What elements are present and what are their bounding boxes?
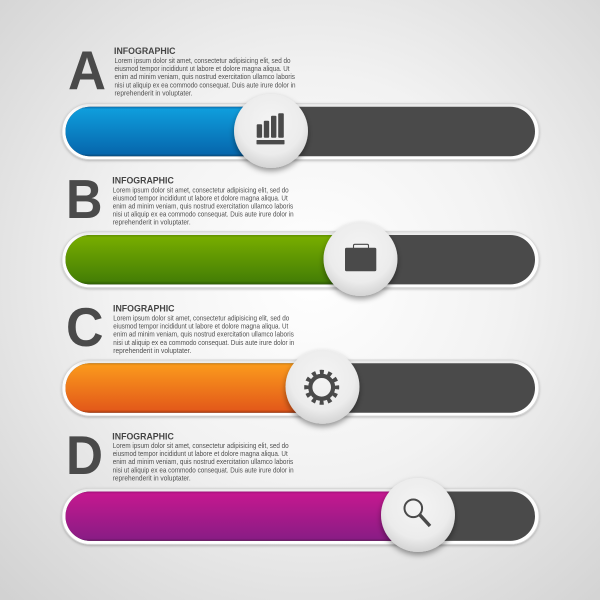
- knob C: [286, 350, 360, 424]
- text block B: reprehenderit in voluptater.: [113, 218, 191, 227]
- text block C: nisi ut aliquip ex ea commodo consequat. Duis aute irure dolor in: [113, 338, 294, 347]
- text block C: enim ad minim veniam, quis nostrud exercitation ullamco laboris: [113, 330, 294, 339]
- letter C: C: [66, 296, 104, 358]
- letter B: B: [66, 168, 102, 230]
- text block C: Lorem ipsum dolor sit amet, consectetur adipisicing elit, sed do: [113, 314, 289, 322]
- text block A: reprehenderit in voluptater.: [114, 88, 192, 97]
- icon: magnifier: [404, 500, 430, 526]
- letter A: A: [68, 39, 106, 101]
- text block C: reprehenderit in voluptater.: [113, 346, 191, 355]
- panel: D: [62, 424, 539, 552]
- heading B: INFOGRAPHIC: [112, 175, 174, 186]
- slider track D: [62, 488, 539, 544]
- text block A: eiusmod tempor incididunt ut labore et dolore magna aliqua. Ut: [114, 64, 290, 73]
- text block A: Lorem ipsum dolor sit amet, consectetur adipisicing elit, sed do: [114, 56, 290, 65]
- text block C: eiusmod tempor incididunt ut labore et dolore magna aliqua. Ut: [113, 322, 288, 331]
- heading D: INFOGRAPHIC: [112, 431, 174, 442]
- knob A: [234, 94, 308, 168]
- text block D: Lorem ipsum dolor sit amet, consectetur adipisicing elit, sed do: [113, 441, 289, 450]
- text block B: enim ad minim veniam, quis nostrud exercitation ullamco laboris: [113, 202, 293, 210]
- icon: briefcase: [345, 244, 376, 271]
- text block D: nisi ut aliquip ex ea commodo consequat. Duis aute irure dolor in: [113, 465, 294, 474]
- panel: A: [62, 39, 539, 168]
- slider track A: [62, 104, 539, 160]
- text block A: nisi ut aliquip ex ea commodo consequat. Duis aute irure dolor in: [114, 80, 296, 89]
- text block B: nisi ut aliquip ex ea commodo consequat. Duis aute irure dolor in: [113, 210, 294, 219]
- knob D: [381, 478, 455, 552]
- text block D: enim ad minim veniam, quis nostrud exercitation ullamco laboris: [113, 457, 293, 466]
- text block B: Lorem ipsum dolor sit amet, consectetur adipisicing elit, sed do: [113, 185, 289, 194]
- icon: bar chart: [256, 113, 284, 144]
- text block A: enim ad minim veniam, quis nostrud exercitation ullamco laboris: [114, 72, 295, 81]
- slider track B: [62, 232, 539, 288]
- panel: C: [62, 296, 539, 424]
- text block A: [114, 56, 296, 97]
- panel: B: [62, 168, 539, 296]
- icon: gear: [306, 372, 337, 402]
- slider track C: [62, 360, 539, 416]
- text block B: eiusmod tempor incididunt ut labore et dolore magna aliqua. Ut: [113, 193, 288, 202]
- text block D: eiusmod tempor incididunt ut labore et dolore magna aliqua. Ut: [113, 449, 288, 458]
- text block D: [113, 441, 294, 482]
- letter D: D: [66, 424, 103, 486]
- text block B: [113, 185, 294, 227]
- text block C: [113, 314, 294, 355]
- text block D: reprehenderit in voluptater.: [113, 473, 191, 482]
- heading C: INFOGRAPHIC: [113, 304, 175, 314]
- knob B: [324, 222, 398, 296]
- heading A: INFOGRAPHIC: [114, 46, 176, 57]
